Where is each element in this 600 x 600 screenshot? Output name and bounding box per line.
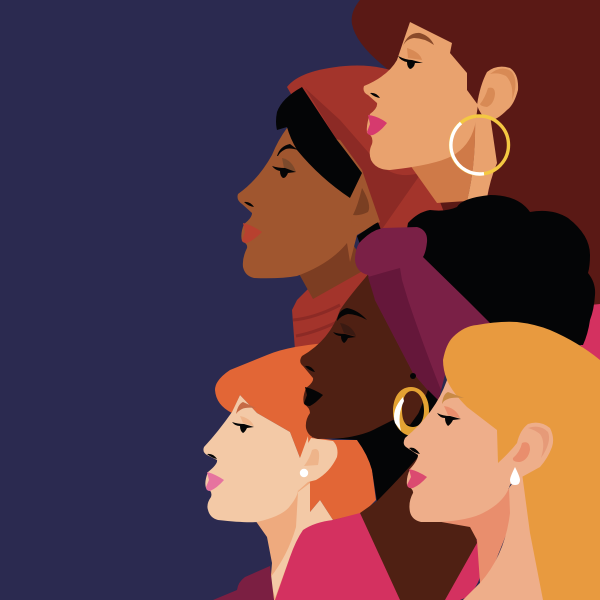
nostril [305,366,315,372]
neck shaded [410,120,475,203]
pink blouse: right shoulder [580,304,600,365]
nostril [370,93,380,98]
hair bun [405,195,595,345]
eyelid [444,406,460,418]
lips [206,472,224,491]
lips [407,469,427,488]
brow [442,392,464,404]
long hair [443,322,600,600]
hair behind hoop [414,390,438,432]
ear inner [480,88,495,107]
face [300,270,440,439]
face [404,380,530,522]
face [203,395,310,522]
eyelid [240,416,254,426]
ear inner [304,449,319,466]
nostril [409,448,420,454]
ear [498,423,553,480]
eye [437,413,461,426]
woman: dark skin, turban [300,195,595,600]
pearl earring [300,469,308,477]
eyelid [282,158,296,172]
woman: orange hair [203,342,376,600]
neck shade [262,232,368,299]
ear [350,180,379,226]
woman: blonde [404,322,600,600]
ear inner [353,188,369,215]
hoop earring [393,387,429,436]
brow [236,402,256,414]
blouse: maroon [213,566,274,600]
ear inner [513,442,530,462]
neck light [467,115,497,201]
hoop earring [450,116,508,174]
ear rim shade [490,68,516,100]
small ear tip [410,373,416,379]
neck light [463,470,545,600]
neck light [270,483,333,598]
ear rim shade [528,427,549,458]
neck shadow [327,395,440,502]
hair: top woman, auburn [352,0,600,310]
scarf stripe [293,305,345,336]
pink blouse [275,500,481,600]
brow [277,144,298,156]
neck [360,457,477,600]
face [238,128,380,278]
turban [355,227,492,402]
eye [333,332,356,343]
brow [403,33,434,46]
eye [398,56,423,69]
head band [276,87,362,198]
woman: headscarf, face [238,87,385,299]
eye [232,422,254,433]
back of neck hair [357,222,385,250]
woman: top, face and neck [364,22,518,203]
headscarf: red, lower folds [292,250,385,350]
back hair [306,437,376,520]
lips [242,223,262,243]
turban shadow [368,268,441,402]
top of head hair [215,342,340,458]
hoop highlight [394,397,404,431]
headscarf: red, upper [287,66,445,240]
eyelid [340,323,356,336]
neck shade [255,480,310,600]
nostril [244,202,254,207]
lips [367,115,387,135]
eyelid shade [407,48,422,60]
brow [337,308,367,321]
nostril [207,454,217,459]
ear [477,67,518,120]
drop earring [510,467,520,485]
eye [272,166,296,178]
neck shade [430,480,520,600]
headscarf shadow fold [305,88,422,232]
ear [298,438,338,491]
lips [304,387,323,406]
face [364,22,478,170]
